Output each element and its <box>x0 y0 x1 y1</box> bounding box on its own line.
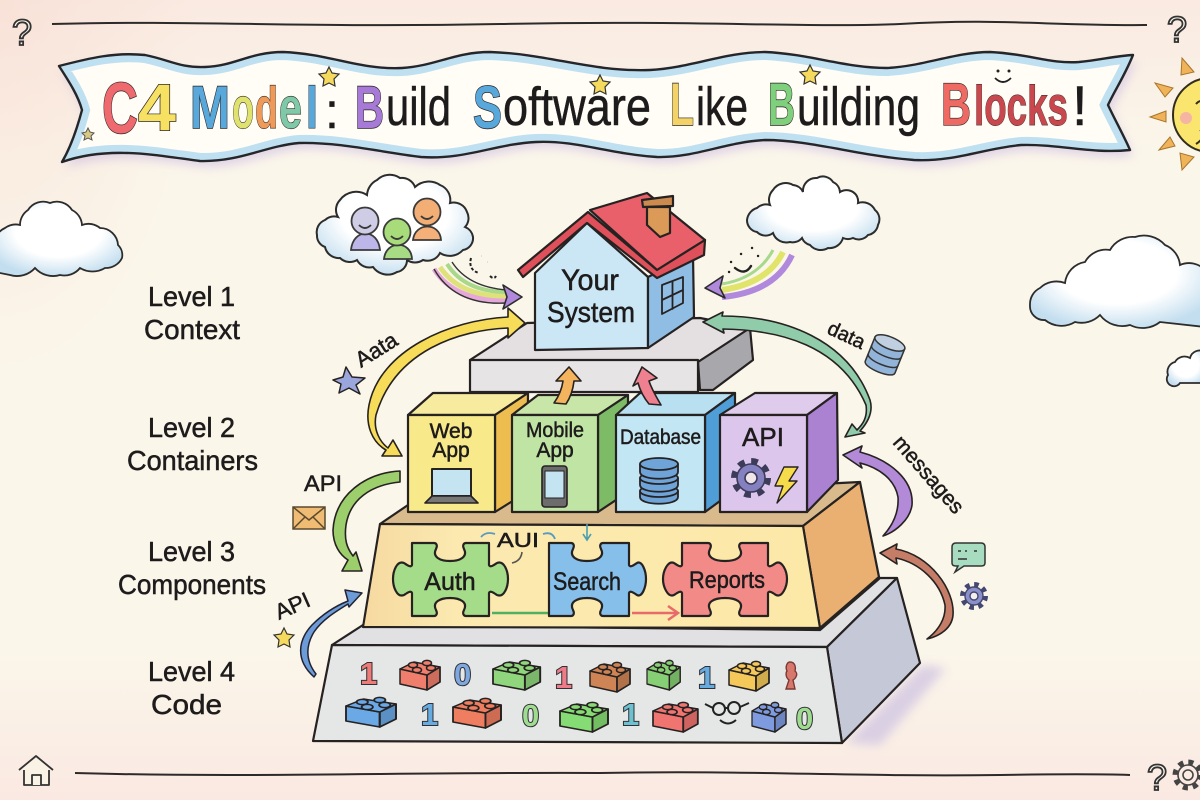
cloud with users <box>317 175 473 275</box>
title text: M <box>190 74 230 141</box>
icon: blue star <box>333 367 365 394</box>
icon: gear bottom right <box>1175 762 1200 788</box>
arrow: purple messages <box>843 446 912 536</box>
code bricks and digits: 1 <box>555 660 572 695</box>
code bricks and digits: 0 <box>796 701 813 736</box>
arrow: blue from code slab <box>301 590 362 677</box>
arrow: rainbow from cloud <box>705 250 792 298</box>
house side wall <box>648 255 694 348</box>
arrow: orange up to platform <box>554 367 581 404</box>
icon: question mark top right: ? <box>1167 9 1187 50</box>
cube: Mobile App <box>512 395 628 512</box>
icon: speech bubble <box>952 543 985 572</box>
title text: uilding <box>797 77 920 137</box>
icon: purple person <box>351 208 380 250</box>
icon: phone <box>542 466 567 507</box>
icon: lightning bolt <box>775 467 798 503</box>
house label <box>547 264 635 329</box>
icon: orange person <box>413 198 441 240</box>
cube: API: API <box>742 422 784 452</box>
icon: tiny figure <box>786 662 797 689</box>
icon: banner stars and smile <box>82 65 1011 140</box>
cube: Database <box>616 393 735 512</box>
title text: d <box>255 76 278 141</box>
arrow: rainbow from users <box>434 262 522 309</box>
level 1: platform <box>470 318 753 392</box>
puzzle: Search: Search <box>553 568 621 596</box>
level labels: Level 3 <box>148 536 235 567</box>
title text: uild <box>386 77 451 137</box>
icon: laptop <box>425 469 478 503</box>
title text: C <box>102 69 138 149</box>
level 3: components slab <box>363 482 879 628</box>
title text <box>102 69 1088 149</box>
code bricks and digits <box>346 656 813 736</box>
level labels: Context <box>144 314 240 345</box>
house roof <box>590 193 705 270</box>
code bricks and digits: 1 <box>622 697 639 732</box>
arrow: pink up to platform <box>633 367 661 405</box>
icon: question mark top left: ? <box>12 12 32 53</box>
arrow: green from web app <box>333 471 400 571</box>
label: API upper left: API <box>304 471 342 496</box>
icon: glasses face <box>705 702 749 724</box>
cube: API <box>720 393 838 512</box>
title text: oftware <box>503 77 651 137</box>
icon: database cylinders <box>640 458 678 504</box>
cloud: top right <box>747 176 879 250</box>
house label: System <box>547 297 635 329</box>
title text: S <box>473 74 502 141</box>
icon: smile near left rainbow <box>470 256 496 278</box>
title text: B <box>941 71 971 138</box>
level labels: Level 1 <box>148 281 235 312</box>
icon: gear <box>734 461 768 495</box>
icon: blue gear <box>962 584 986 608</box>
icon: green person <box>384 218 412 259</box>
code bricks and digits: 0 <box>522 698 539 733</box>
level labels: Level 4 <box>148 656 235 687</box>
cube: Mobile App: Mobile <box>526 419 584 442</box>
title text: ike <box>696 77 748 137</box>
level labels: Containers <box>127 445 258 476</box>
cloud: small right edge <box>1167 350 1200 386</box>
top hand-drawn rule <box>52 22 1147 25</box>
cloud: far right <box>1030 236 1200 328</box>
AUI label with link marks <box>481 524 591 563</box>
title text: 4 <box>138 70 176 144</box>
house label: Your <box>561 264 619 297</box>
house window <box>662 277 683 314</box>
house: your system <box>518 193 705 350</box>
title text: ! <box>1072 74 1088 137</box>
connector: auth to search <box>492 612 548 614</box>
icon: smile near right rainbow <box>729 248 758 272</box>
puzzle: Search <box>549 543 646 616</box>
level labels: Components <box>118 569 266 600</box>
arrow: green data arc <box>703 312 871 437</box>
arrow: brown from slab <box>880 544 953 639</box>
title text: : <box>325 83 339 139</box>
cube: Mobile App: App <box>536 439 574 462</box>
label: API lower left: API <box>271 587 314 625</box>
bottom hand-drawn rule <box>75 772 1130 775</box>
title text: B <box>355 74 384 141</box>
icon: question mark bottom right: ? <box>1147 757 1167 798</box>
title banner <box>59 52 1136 168</box>
icon: envelope <box>293 507 325 529</box>
level labels: Level 2 <box>148 412 235 443</box>
puzzle: Reports: Reports <box>689 567 765 594</box>
code bricks and digits: 1 <box>360 656 377 691</box>
puzzle: Auth <box>393 543 508 616</box>
puzzle: Reports <box>663 543 787 616</box>
label: Aata: Aata <box>350 327 403 372</box>
icon: sun <box>1150 58 1200 170</box>
level 4: code slab <box>313 578 946 745</box>
label: messages: messages <box>888 431 968 519</box>
cube: Web App: App <box>432 439 470 462</box>
house chimney <box>642 196 673 237</box>
icon: yellow star <box>274 628 294 647</box>
cube: Web App <box>408 393 528 512</box>
title text: L <box>670 71 694 138</box>
puzzle: Auth: Auth <box>424 568 476 596</box>
title text: o <box>232 76 254 141</box>
cube: Web App: Web <box>430 420 472 443</box>
icon: database tilted <box>863 331 907 378</box>
AUI label with link marks: AUI <box>497 530 539 552</box>
arrow: search to reports <box>632 606 678 620</box>
level labels: Code <box>151 689 222 720</box>
code bricks and digits: 1 <box>698 660 715 695</box>
title text: locks <box>974 74 1068 137</box>
title text: l <box>306 76 318 141</box>
title text: B <box>768 71 795 138</box>
code bricks and digits: 1 <box>421 697 438 732</box>
arrow: yellow data arc <box>368 308 525 456</box>
cube: Database: Database <box>620 426 701 449</box>
code bricks and digits: 0 <box>454 657 471 692</box>
house front wall <box>535 223 648 350</box>
cloud: far left <box>0 202 122 276</box>
level labels <box>118 281 266 720</box>
label: data: data <box>824 318 869 354</box>
house roof edge <box>518 212 705 278</box>
title text: e <box>279 76 302 141</box>
icon: small house bottom left <box>19 756 53 785</box>
